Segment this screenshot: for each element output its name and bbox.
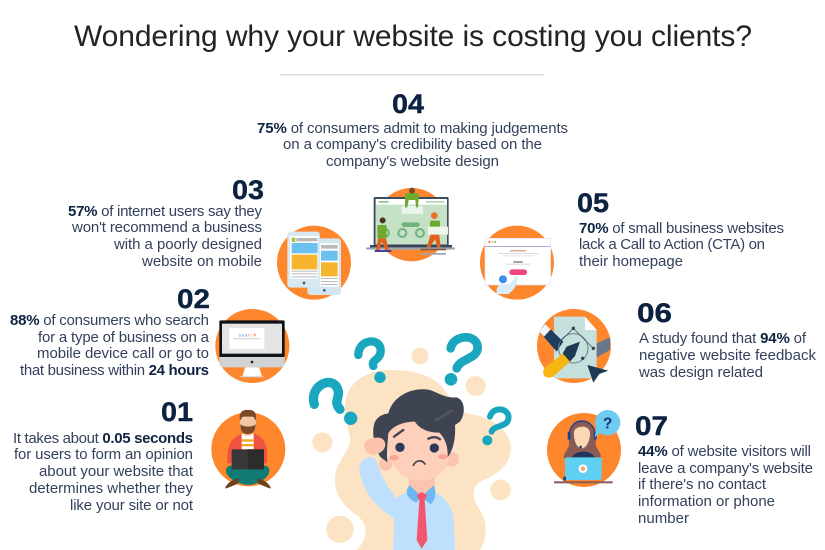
item 04 xyxy=(257,89,568,170)
question marks xyxy=(313,337,509,432)
text 02: that business within 24 hours xyxy=(20,362,209,379)
number 01: 01 xyxy=(161,397,193,427)
fist xyxy=(364,438,385,455)
text 05 xyxy=(579,220,784,270)
text 05: lack a Call to Action (CTA) on xyxy=(579,236,765,253)
face details xyxy=(395,443,405,452)
text 03: won't recommend a business xyxy=(71,219,262,236)
item 05 xyxy=(577,188,784,270)
beige blob background xyxy=(335,370,511,550)
text 03 xyxy=(68,203,262,270)
text 03: with a poorly designed xyxy=(113,236,262,253)
text 04: on a company's credibility based on the xyxy=(283,136,542,153)
text 03: website on mobile xyxy=(141,253,262,270)
icon 02: desktop monitor xyxy=(215,309,289,383)
text 02: for a type of business on a xyxy=(38,329,210,346)
text 01: for users to form an opinion xyxy=(14,446,193,463)
item 02 xyxy=(10,284,210,379)
text 06 xyxy=(638,330,816,381)
text 02 xyxy=(10,312,210,379)
face xyxy=(387,419,450,481)
item 07 xyxy=(635,411,813,527)
number 04: 04 xyxy=(392,89,424,119)
text 07: if there's no contact xyxy=(638,476,767,493)
text 06: A study found that 94% of xyxy=(639,330,807,347)
text 01: determines whether they xyxy=(29,480,194,497)
icon 04: laptop with team xyxy=(366,188,455,261)
text 06: negative website feedback xyxy=(639,347,816,364)
text 04: 75% of consumers admit to making judgements xyxy=(257,120,568,137)
number 07: 07 xyxy=(635,411,668,441)
text 01: like your site or not xyxy=(70,497,194,514)
tie xyxy=(417,492,427,549)
text 03: 57% of internet users say they xyxy=(68,203,262,220)
icon 05: call to action browser xyxy=(480,226,554,300)
central illustration: confused man xyxy=(312,337,511,550)
collar xyxy=(407,485,435,504)
text 02: 88% of consumers who search xyxy=(10,312,209,329)
text 04: company's website design xyxy=(326,153,499,170)
text 06: was design related xyxy=(638,364,763,381)
number 06: 06 xyxy=(637,298,672,328)
item 06 xyxy=(637,298,816,381)
text 01: about your website that xyxy=(39,463,194,480)
number 03: 03 xyxy=(232,175,264,205)
icon 03: phones xyxy=(277,226,351,300)
text 07 xyxy=(638,443,813,527)
icon 06: pen tool xyxy=(537,309,611,383)
text 02: mobile device call or go to xyxy=(37,345,209,362)
text 04 xyxy=(257,120,568,170)
item 03 xyxy=(68,175,264,270)
number 05: 05 xyxy=(577,188,609,218)
ears xyxy=(379,457,392,471)
text 05: their homepage xyxy=(579,253,683,270)
text 07: information or phone xyxy=(638,493,775,510)
icon 02: desktop monitor: search xyxy=(239,332,257,337)
shirt and arm xyxy=(359,457,455,550)
text 07: 44% of website visitors will xyxy=(638,443,811,460)
icon 07: support agent: ? xyxy=(603,415,612,432)
text 07: leave a company's website xyxy=(638,460,813,477)
text 01: It takes about 0.05 seconds xyxy=(13,430,193,447)
title: Wondering why your website is costing you clients? xyxy=(74,20,752,53)
icon 07: support agent xyxy=(547,410,621,487)
neck xyxy=(408,473,435,502)
icon 01: man with laptop xyxy=(211,410,285,489)
text 01 xyxy=(13,430,194,514)
hair xyxy=(373,389,464,462)
hair highlight xyxy=(436,411,452,420)
text 05: 70% of small business websites xyxy=(579,220,784,237)
text 07: number xyxy=(638,510,689,527)
number 02: 02 xyxy=(177,284,210,314)
item 01 xyxy=(13,397,194,514)
